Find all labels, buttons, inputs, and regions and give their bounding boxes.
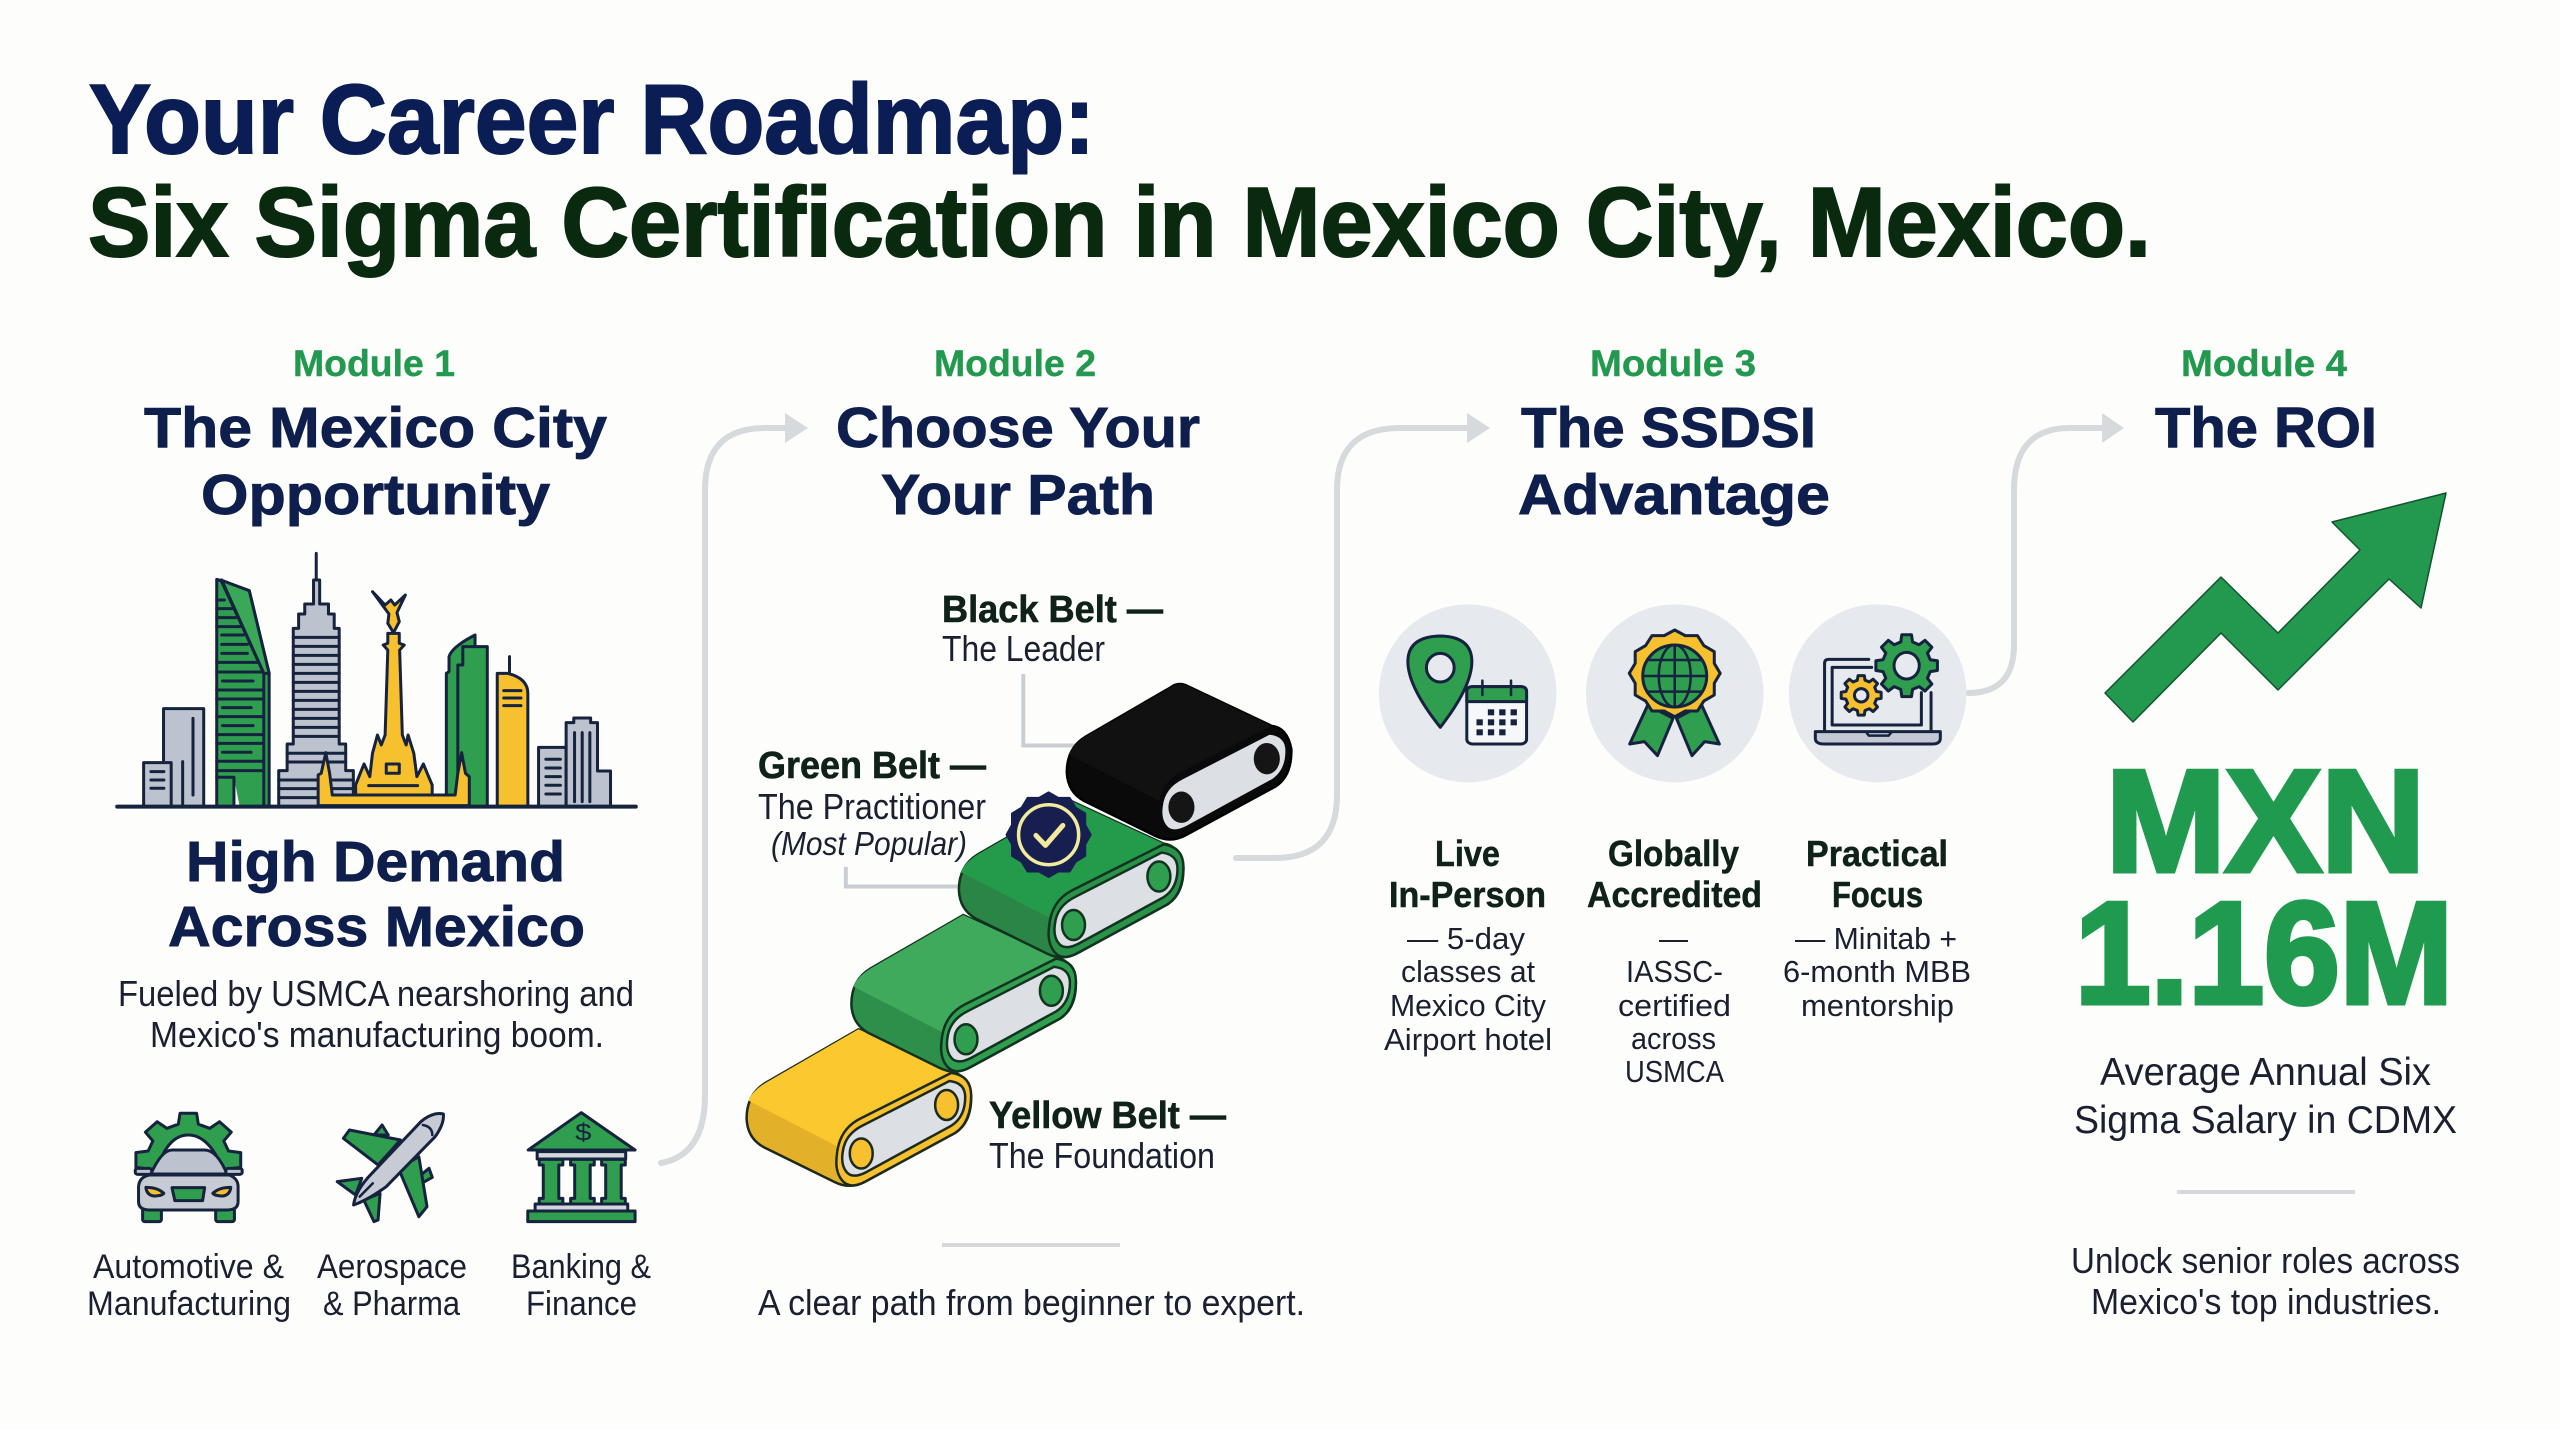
text: practical focus: — Minitab +: [1795, 921, 1957, 956]
industry labels: Aerospace: [317, 1248, 467, 1286]
industry labels: & Pharma: [323, 1285, 460, 1323]
title: [88, 64, 2151, 277]
title: Six Sigma Certification in Mexico City, Mexico.: [88, 167, 2151, 277]
text: practical focus: 6-month MBB: [1783, 954, 1971, 989]
yellow belt label: The Foundation: [989, 1135, 1215, 1176]
text: practical focus: Practical: [1806, 833, 1948, 874]
icon: bank: [528, 1113, 635, 1222]
text: globally accredited: [1587, 833, 1762, 1089]
text: globally accredited: across: [1631, 1021, 1716, 1056]
salary figure: MXN: [2106, 740, 2425, 902]
text: globally accredited: certified: [1618, 988, 1731, 1023]
industry labels: Finance: [526, 1285, 637, 1323]
text: outcome note: Mexico's top industries.: [2091, 1281, 2441, 1322]
industry labels: Manufacturing: [87, 1285, 291, 1323]
panel: module 3 advantage: [1379, 343, 1971, 1089]
subheading: high demand: Across Mexico: [168, 895, 585, 959]
module 4 heading: Module 4: [2181, 343, 2347, 384]
text: practical focus: [1783, 833, 1971, 1023]
text: practical focus: Focus: [1832, 874, 1923, 915]
module 3 heading: Advantage: [1518, 463, 1830, 527]
upper green belt: [959, 801, 1183, 957]
text: globally accredited: Accredited: [1587, 874, 1762, 915]
yellow belt label: [989, 1095, 1226, 1176]
module 3 heading: [1518, 343, 1830, 527]
text: demand description: [118, 973, 634, 1055]
black belt label: [942, 589, 1163, 669]
green belt label: The Practitioner: [758, 786, 986, 827]
text: live in-person: Live: [1435, 833, 1500, 874]
green belt label: Green Belt —: [758, 745, 986, 787]
industry labels: [87, 1248, 651, 1323]
text: salary caption: [2074, 1051, 2457, 1142]
text: globally accredited: Globally: [1608, 833, 1739, 874]
text: live in-person: classes at: [1401, 954, 1535, 989]
text: outcome note: Unlock senior roles across: [2071, 1240, 2460, 1281]
text: live in-person: Airport hotel: [1384, 1022, 1552, 1057]
text: live in-person: In-Person: [1389, 874, 1546, 915]
panel: module 1 opportunity: [87, 343, 651, 1323]
lower green belt: [851, 915, 1076, 1072]
module 3 heading: Module 3: [1590, 343, 1756, 384]
icon: laptop with gears: [1789, 604, 1966, 782]
arrow: module 1 to module 2: [661, 413, 808, 1163]
icon: airplane: [337, 1114, 443, 1222]
arrow: module 3 to module 4: [1968, 413, 2124, 693]
black belt: [1067, 684, 1291, 839]
module 2 heading: Your Path: [881, 463, 1155, 527]
module 4 heading: [2155, 343, 2377, 460]
text: live in-person: Mexico City: [1390, 988, 1546, 1023]
industry labels: Automotive &: [93, 1248, 284, 1286]
text: outcome note: [2071, 1240, 2460, 1322]
icon: rising arrow: [2105, 493, 2446, 722]
module 1 heading: Opportunity: [201, 463, 550, 527]
text: practical focus: mentorship: [1801, 988, 1954, 1023]
panel: module 2 belts: [747, 343, 1305, 1323]
text: live in-person: [1384, 833, 1552, 1057]
module 2 heading: Module 2: [934, 343, 1096, 384]
icon: Mexico City skyline: [117, 553, 636, 807]
belt staircase: [747, 674, 1291, 1186]
module 1 heading: The Mexico City: [144, 396, 607, 460]
salary figure: 1.16M: [2075, 872, 2453, 1034]
panel: module 4 ROI: [2071, 343, 2460, 1322]
module 2 heading: Choose Your: [836, 396, 1200, 460]
text: salary caption: Sigma Salary in CDMX: [2074, 1099, 2457, 1142]
text: path summary: A clear path from beginner to expert.: [758, 1282, 1305, 1323]
icon: location and calendar: [1379, 604, 1556, 782]
salary figure: [2075, 740, 2453, 1034]
black belt label: Black Belt —: [942, 589, 1163, 631]
module 1 heading: [144, 343, 607, 527]
icon: car and gear: [135, 1113, 242, 1222]
module 2 heading: [836, 343, 1200, 527]
module 1 heading: Module 1: [293, 343, 455, 384]
yellow belt: [747, 1029, 971, 1186]
text: salary caption: Average Annual Six: [2100, 1051, 2431, 1094]
green belt label: (Most Popular): [771, 825, 967, 862]
module 4 heading: The ROI: [2155, 396, 2377, 460]
industry labels: Banking &: [511, 1248, 651, 1286]
text: live in-person: — 5-day: [1407, 921, 1525, 956]
text: globally accredited: USMCA: [1625, 1054, 1724, 1089]
yellow belt label: Yellow Belt —: [989, 1095, 1226, 1137]
module 3 heading: The SSDSI: [1521, 396, 1816, 460]
black belt label: The Leader: [942, 628, 1105, 669]
text: demand description: Mexico's manufacturing boom.: [150, 1014, 604, 1055]
text: demand description: Fueled by USMCA nearshoring and: [118, 973, 634, 1014]
text: globally accredited: —: [1659, 921, 1688, 956]
subheading: high demand: [168, 830, 585, 959]
arrow: module 2 to module 3: [1236, 413, 1490, 858]
title: Your Career Roadmap:: [89, 64, 1095, 174]
subheading: high demand: High Demand: [186, 830, 565, 894]
text: globally accredited: IASSC-: [1626, 954, 1723, 989]
green belt label: [758, 745, 986, 862]
icon: accredited globe medal: [1586, 604, 1764, 782]
icon: bank: $: [575, 1119, 592, 1146]
icon: most popular badge: [1007, 793, 1090, 876]
